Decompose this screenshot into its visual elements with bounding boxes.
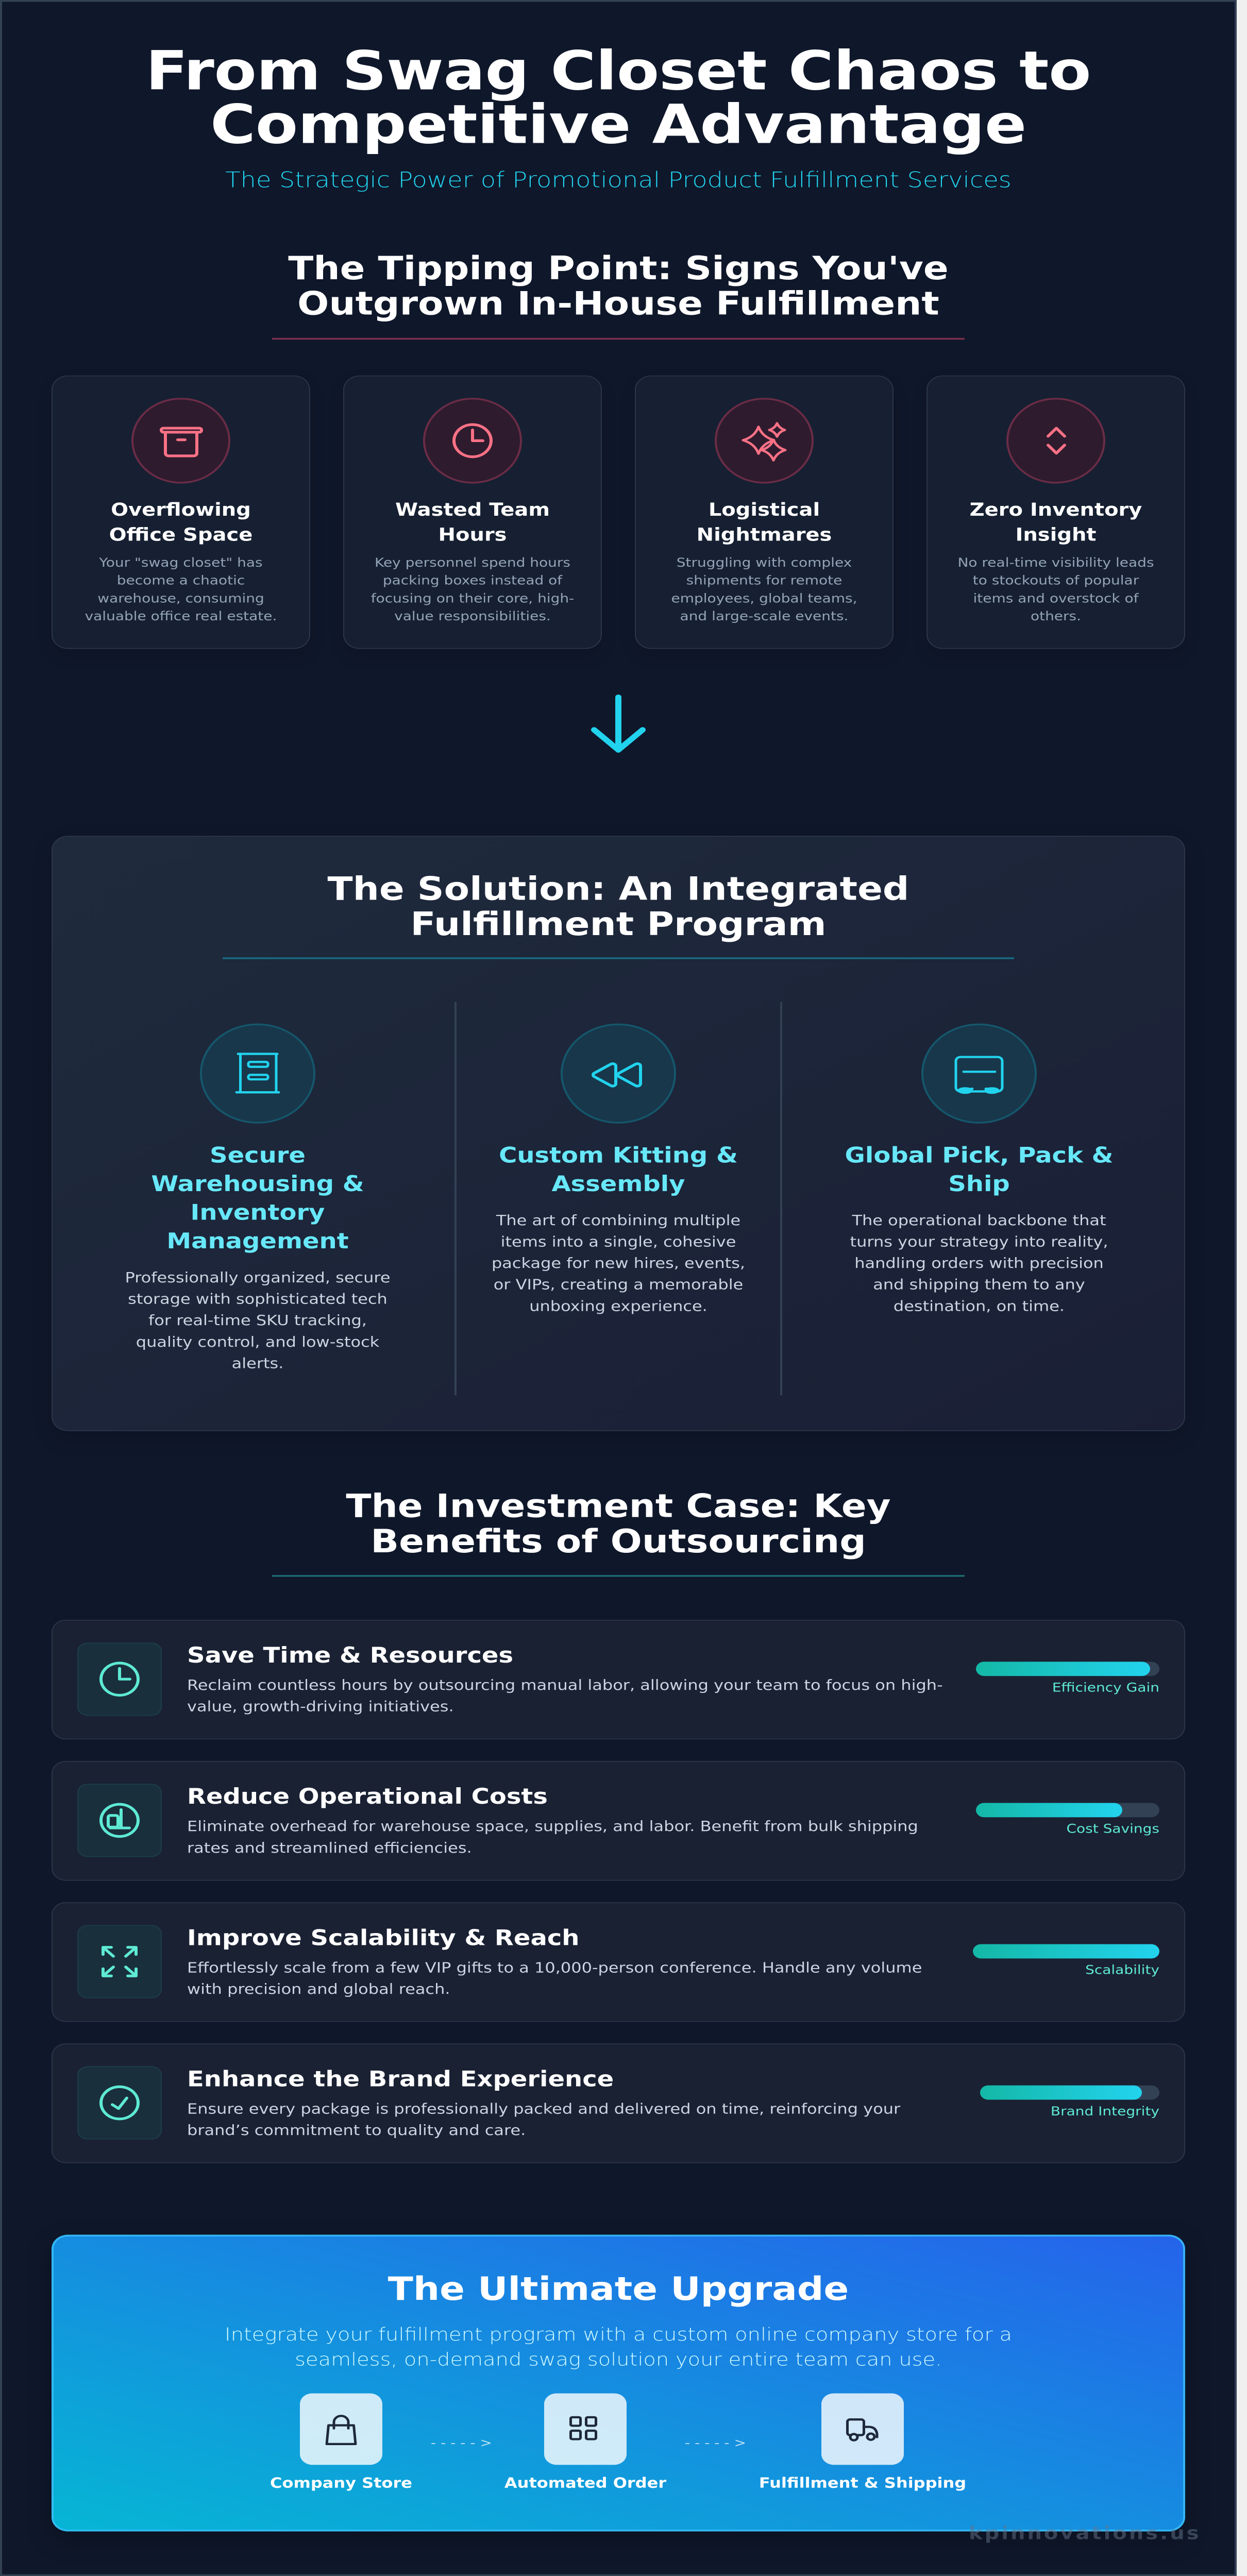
column text: warehousing: alerts. — [232, 1354, 283, 1371]
upgrade text — [52, 2323, 1185, 2372]
heading: the ultimate upgrade: The Ultimate Upgrade — [388, 2270, 849, 2308]
bar label: Brand Integrity — [1051, 2104, 1159, 2119]
panel: improve scalability and reach — [52, 1902, 1185, 2022]
bar label: Scalability — [1085, 1962, 1159, 1977]
card text: become a chaotic — [117, 573, 245, 588]
heading: the investment case: The Investment Case: Key — [346, 1487, 891, 1524]
card text: No real-time visibility leads — [957, 555, 1154, 570]
step box: automated order — [544, 2393, 627, 2465]
icon: clock — [452, 423, 493, 459]
step label: automated order: Automated Order — [504, 2474, 666, 2491]
card title: Overflowing — [111, 500, 251, 520]
heading: the tipping point — [288, 249, 949, 323]
panel: the ultimate upgrade — [52, 2235, 1185, 2532]
progress bar: scalability — [973, 1944, 1159, 1958]
card text: Key personnel spend hours — [375, 555, 570, 570]
panel: save time and resources — [52, 1620, 1185, 1739]
upgrade text: Integrate your fulfillment program with a custom online company store for a — [225, 2325, 1012, 2345]
column text: kitting: unboxing experience. — [529, 1297, 707, 1314]
column text: kitting: package for new hires, events, — [492, 1255, 745, 1272]
title: From Swag Closet Chaos to — [146, 40, 1091, 103]
progress bar: efficiency gain — [976, 1662, 1159, 1676]
benefit title: Enhance the Brand Experience — [187, 2066, 614, 2092]
icon: clock — [95, 1658, 144, 1701]
icon: sparkles — [742, 422, 786, 462]
panel: logistical nightmares — [635, 376, 894, 649]
progress bar: brand integrity — [980, 2086, 1159, 2100]
panel: enhance the brand experience — [52, 2043, 1185, 2163]
benefit text: Eliminate overhead for warehouse space, supplies, and labor. Benefit from bulk shipping — [187, 1818, 918, 1835]
step box: fulfillment and shipping — [821, 2393, 904, 2465]
icon: warehouse cabinet — [233, 1052, 282, 1095]
column text: shipping: and shipping them to any — [873, 1276, 1085, 1293]
watermark: kpinnovations.us — [969, 2523, 1201, 2544]
panel: reduce operational costs — [52, 1761, 1185, 1880]
icon circle: sparkles — [715, 398, 814, 484]
icon circle: archive box — [131, 398, 230, 484]
progress bar: cost savings — [976, 1803, 1159, 1817]
benefit title: Reduce Operational Costs — [187, 1784, 548, 1809]
column text: kitting: The art of combining multiple — [496, 1212, 740, 1229]
icon circle: kitting — [561, 1024, 676, 1124]
card text: warehouse, consuming — [97, 591, 264, 605]
column title: warehousing: Secure — [210, 1143, 306, 1168]
card title — [970, 500, 1142, 545]
panel: the solution — [52, 836, 1185, 1431]
column title: shipping: Ship — [948, 1172, 1010, 1196]
column text: shipping: handling orders with precision — [854, 1255, 1104, 1272]
step label: fulfillment and shipping: Fulfillment & Shipping — [759, 2474, 966, 2491]
column text: kitting — [438, 1209, 799, 1317]
column title: warehousing — [77, 1141, 438, 1256]
column text: warehousing — [77, 1266, 438, 1374]
arrow: down — [587, 693, 649, 755]
card text — [671, 555, 857, 623]
benefit text: with precision and global reach. — [187, 1980, 450, 1997]
card title: Logistical — [709, 500, 820, 520]
icon circle: clock — [423, 398, 522, 484]
benefit title: Improve Scalability & Reach — [187, 1925, 579, 1951]
card text: to stockouts of popular — [973, 573, 1139, 588]
icon: grid — [568, 2415, 599, 2442]
heading: the solution: The Solution: An Integrated — [328, 870, 909, 907]
benefit text: rates and streamlined efficiencies. — [187, 1839, 472, 1856]
column text: shipping — [799, 1209, 1159, 1317]
icon: expand arrows — [95, 1940, 144, 1983]
benefit text: Effortlessly scale from a few VIP gifts to a 10,000-person conference. Handle any volume — [187, 1959, 922, 1976]
column title: warehousing: Warehousing & — [151, 1172, 364, 1196]
card text: employees, global teams, — [671, 591, 857, 605]
benefit text: Ensure every package is professionally packed and delivered on time, reinforcing your — [187, 2100, 900, 2117]
heading: the solution — [52, 871, 1185, 942]
heading: the solution: Fulfillment Program — [410, 905, 827, 943]
card text — [371, 555, 574, 623]
benefit text — [187, 1816, 918, 1858]
icon circle: chevrons — [1006, 398, 1105, 484]
icon: chevrons — [1047, 427, 1066, 454]
column text: warehousing: storage with sophisticated tech — [128, 1290, 387, 1307]
card title: Office Space — [109, 524, 252, 545]
card title — [697, 500, 832, 545]
bar label: Cost Savings — [1066, 1821, 1159, 1836]
column title: warehousing: Management — [166, 1229, 349, 1253]
column text: shipping: turns your strategy into reality, — [850, 1233, 1108, 1250]
benefit text — [187, 1674, 943, 1717]
column text: warehousing: for real-time SKU tracking, — [148, 1312, 367, 1329]
column text: kitting: items into a single, cohesive — [501, 1233, 736, 1250]
heading: the investment case — [0, 1488, 1237, 1559]
icon circle: warehouse — [200, 1024, 315, 1124]
panel: overflowing office space — [52, 376, 310, 649]
card title: Wasted Team — [395, 500, 550, 520]
icon: shopping bag — [319, 2411, 363, 2449]
card text: Struggling with complex — [677, 555, 852, 570]
card text: items and overstock of — [973, 591, 1138, 605]
icon: check circle — [95, 2081, 144, 2124]
icon: truck — [840, 2413, 886, 2454]
icon: rewind triangles — [581, 1048, 655, 1101]
card text: value responsibilities. — [394, 609, 551, 623]
heading: the tipping point: The Tipping Point: Signs You've — [288, 249, 949, 287]
icon: shipping card — [954, 1052, 1004, 1095]
step box: company store — [300, 2393, 382, 2465]
card text — [85, 555, 277, 623]
card title: Hours — [439, 524, 507, 545]
benefit text: brand’s commitment to quality and care. — [187, 2122, 526, 2139]
title: Competitive Advantage — [210, 94, 1026, 156]
title — [146, 40, 1091, 156]
card text: and large-scale events. — [680, 609, 848, 623]
card title — [109, 500, 252, 545]
card text: shipments for remote — [686, 573, 842, 588]
column title: kitting: Assembly — [552, 1172, 685, 1196]
heading: the investment case: Benefits of Outsourcing — [370, 1522, 866, 1560]
benefit text — [187, 1957, 922, 1999]
card text: packing boxes instead of — [383, 573, 562, 588]
icon box — [77, 2066, 162, 2140]
card text: valuable office real estate. — [85, 609, 277, 623]
column text: kitting: or VIPs, creating a memorable — [494, 1276, 743, 1293]
column title: warehousing: Inventory — [191, 1200, 325, 1225]
benefit text: Reclaim countless hours by outsourcing manual labor, allowing your team to focus on high- — [187, 1676, 943, 1693]
bar label: Efficiency Gain — [1052, 1680, 1159, 1695]
heading: the tipping point: Outgrown In-House Fulfillment — [297, 285, 939, 323]
upgrade text: seamless, on-demand swag solution your entire team can use. — [295, 2349, 942, 2370]
column text: shipping: destination, on time. — [894, 1297, 1065, 1314]
column text: warehousing: quality control, and low-stock — [136, 1333, 379, 1350]
card title — [395, 500, 550, 545]
benefit text: value, growth-driving initiatives. — [187, 1698, 454, 1715]
icon: archive box — [160, 427, 203, 457]
icon box — [77, 1642, 162, 1716]
card text: others. — [1031, 609, 1081, 623]
column text: warehousing: Professionally organized, secure — [125, 1269, 391, 1286]
flow arrow 1: -----> — [431, 2435, 497, 2450]
card text — [957, 555, 1154, 623]
benefit title: Save Time & Resources — [187, 1643, 513, 1668]
icon circle: shipping — [921, 1024, 1037, 1124]
benefit text — [187, 2098, 900, 2141]
panel: zero inventory insight — [926, 376, 1185, 649]
step label: company store: Company Store — [270, 2474, 412, 2491]
flow arrow 2: -----> — [685, 2435, 751, 2450]
card text: focusing on their core, high- — [371, 591, 574, 605]
card title: Nightmares — [697, 524, 832, 545]
column title: kitting: Custom Kitting & — [499, 1143, 738, 1168]
panel: wasted team hours — [343, 376, 602, 649]
icon box — [77, 1784, 162, 1857]
card title: Insight — [1015, 524, 1097, 545]
card text: Your "swag closet" has — [99, 555, 263, 570]
column text: shipping: The operational backbone that — [852, 1212, 1106, 1229]
column title: kitting — [438, 1141, 799, 1198]
column title: shipping: Global Pick, Pack & — [845, 1143, 1113, 1168]
icon: coin — [95, 1799, 144, 1842]
column title: shipping — [799, 1141, 1159, 1198]
card title: Zero Inventory — [970, 500, 1142, 520]
icon box — [77, 1925, 162, 1998]
subtitle: The Strategic Power of Promotional Product Fulfillment Services — [225, 167, 1012, 193]
